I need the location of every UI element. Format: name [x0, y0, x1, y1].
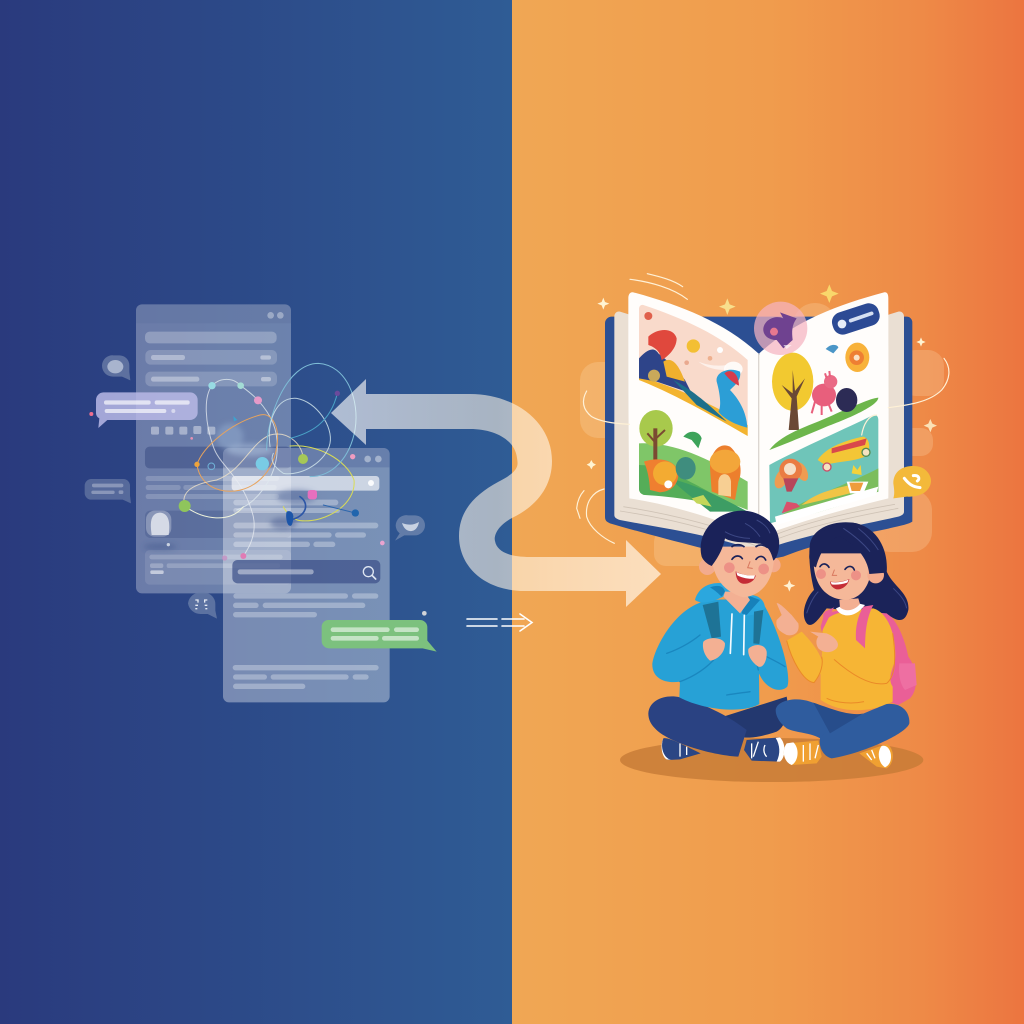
- boy hoodie: [652, 600, 788, 710]
- speech bubble: green: [322, 620, 437, 652]
- boy trouser legs: [723, 697, 788, 738]
- ground shadow: [620, 738, 923, 782]
- illustration: open storybook: [577, 274, 949, 562]
- icon: pink circle badge: [754, 302, 807, 355]
- bottom white page strip right: [775, 487, 878, 525]
- window: front interface panel: [223, 448, 390, 702]
- panel: left interface windows and network: [85, 304, 437, 702]
- girl backpack straps: [821, 605, 873, 648]
- girl shoes: [784, 741, 822, 765]
- left page: [628, 292, 758, 537]
- decorative motion lines: [577, 274, 949, 543]
- girl sweater: [787, 608, 895, 710]
- book cover: [605, 317, 912, 562]
- picture: top right scene: [769, 301, 882, 450]
- girl: [776, 523, 917, 768]
- girl hands: [776, 603, 799, 635]
- page stack right: [758, 312, 904, 552]
- picture: top left scene: [639, 305, 748, 436]
- girl backpack: [823, 605, 916, 705]
- right page: [759, 292, 889, 537]
- speech bubble: scan icon: [188, 593, 217, 619]
- peach background shapes behind book: [580, 303, 944, 566]
- network smudges: [143, 423, 317, 550]
- boy head: [699, 558, 716, 575]
- panel: orange right background: [512, 0, 1024, 1024]
- window: back interface panel: [136, 304, 291, 593]
- picture: bottom right scene: [769, 415, 878, 523]
- picture: bottom left scene: [639, 410, 748, 512]
- girl collar: [836, 603, 865, 615]
- speech bubble: purple: [96, 392, 198, 428]
- sparkle near children: [783, 580, 795, 592]
- girl head: [814, 553, 872, 600]
- speech bubble: top small: [102, 355, 130, 380]
- icon: yellow speech bubble: [893, 466, 931, 498]
- boy hands: [703, 638, 725, 661]
- speech bubble: left small: [85, 479, 131, 503]
- girl hair back: [804, 522, 908, 625]
- network nodes: [89, 382, 427, 616]
- speech bubble: smile: [395, 515, 425, 541]
- network diagram: [184, 363, 356, 556]
- girl trouser legs: [776, 699, 857, 740]
- icon: double arrow between panels: [467, 614, 532, 631]
- boy shoes: [662, 738, 701, 760]
- illustration: two laughing children: [620, 511, 923, 782]
- boy backpack straps: [703, 602, 763, 644]
- pill badge: [829, 301, 882, 337]
- boy: [648, 511, 788, 762]
- panel: blue left background: [0, 0, 512, 1024]
- decorative sparkles: [587, 284, 937, 469]
- arrow: winding flow between the two panels: [331, 379, 661, 607]
- page stack left: [614, 312, 758, 552]
- search bar: [232, 560, 380, 583]
